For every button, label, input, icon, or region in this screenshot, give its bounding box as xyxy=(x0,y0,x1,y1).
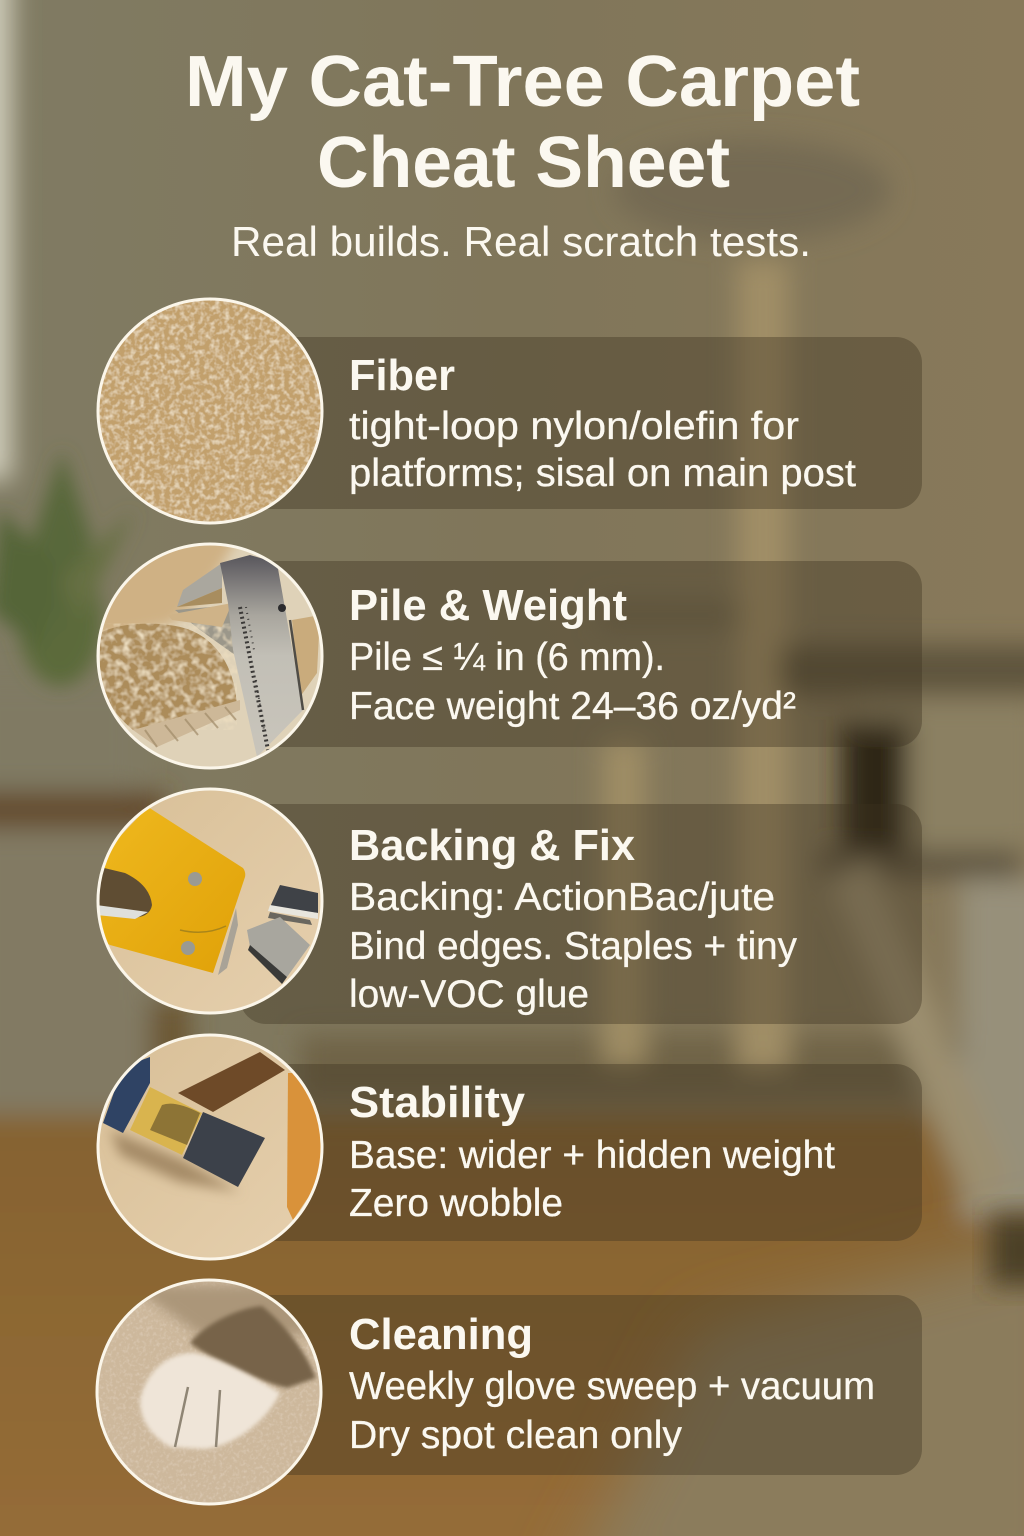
text: pile and weight details: Face weight 24–36 oz/yd² xyxy=(349,685,796,728)
title: Cheat Sheet xyxy=(317,123,730,203)
heading: stability: Stability xyxy=(349,1078,526,1127)
text: backing and fix details: Backing: ActionBac/jute xyxy=(349,876,775,919)
text: fiber details: platforms; sisal on main post xyxy=(349,452,856,495)
text: backing and fix details: Bind edges. Staples + tiny xyxy=(349,925,797,968)
icon: caliper measuring carpet pile xyxy=(90,535,325,770)
text: stability details: Base: wider + hidden weight xyxy=(349,1134,835,1177)
panel: cleaning xyxy=(240,1295,922,1475)
text: pile and weight details xyxy=(349,636,796,728)
icon: base bracket on wood xyxy=(95,1032,325,1262)
panel: backing and fix xyxy=(240,804,922,1024)
text: stability details xyxy=(349,1134,835,1225)
panel: stability xyxy=(240,1064,922,1241)
text: cleaning details: Weekly glove sweep + vacuum xyxy=(349,1365,875,1408)
heading: pile and weight: Pile & Weight xyxy=(349,581,627,630)
icon: carpet fiber swatch xyxy=(95,296,325,526)
icon: cat paw on carpet xyxy=(95,1278,325,1508)
text: cleaning details: Dry spot clean only xyxy=(349,1414,682,1457)
title xyxy=(185,42,860,203)
text: fiber details xyxy=(349,405,856,495)
text: cleaning details xyxy=(349,1365,875,1457)
text: pile and weight details: Pile ≤ ¼ in (6 mm). xyxy=(349,636,665,679)
text: fiber details: tight-loop nylon/olefin for xyxy=(349,405,799,448)
text: backing and fix details xyxy=(349,876,797,1016)
heading: backing and fix: Backing & Fix xyxy=(349,821,636,870)
panel: fiber xyxy=(240,337,922,509)
text: backing and fix details: low-VOC glue xyxy=(349,973,589,1016)
heading: cleaning: Cleaning xyxy=(349,1310,533,1359)
panel: pile and weight xyxy=(240,561,922,747)
subtitle: Real builds. Real scratch tests. xyxy=(231,218,811,265)
heading: fiber: Fiber xyxy=(349,351,455,400)
icon: yellow stapler and staples xyxy=(90,785,325,1015)
title: My Cat-Tree Carpet xyxy=(185,42,860,122)
text: stability details: Zero wobble xyxy=(349,1182,563,1225)
